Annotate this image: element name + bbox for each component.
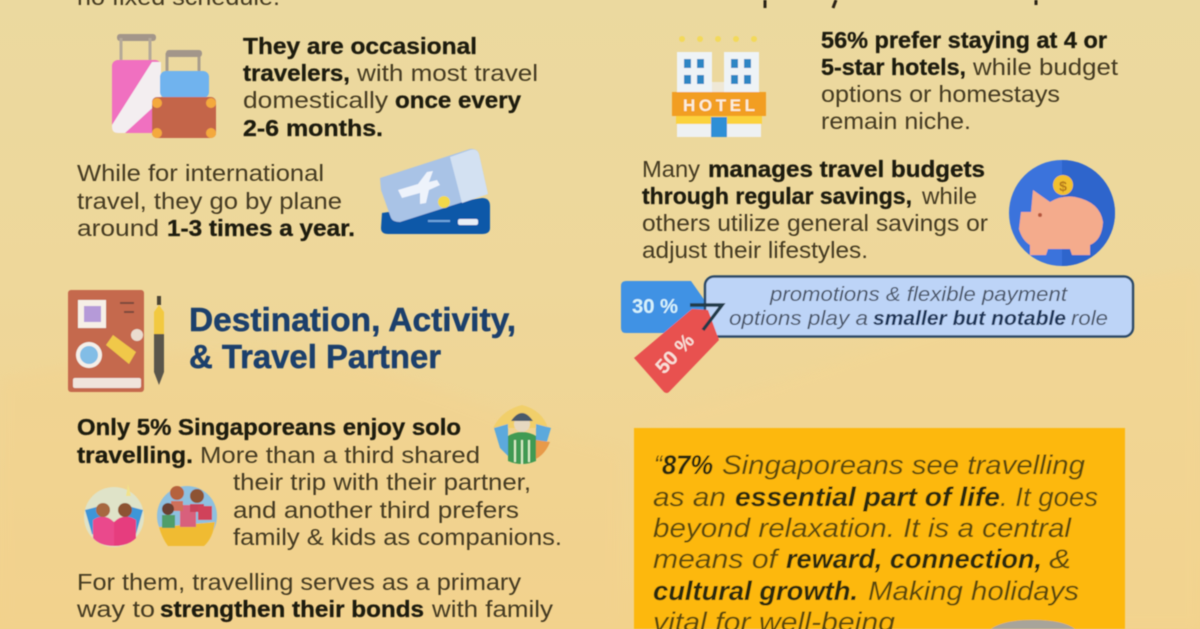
text: international travel: While for international [77, 160, 324, 186]
text: hotel preference [821, 27, 1119, 134]
text: strengthening bonds: way to [76, 596, 155, 622]
text: occasional travelers: with most travel [356, 60, 538, 86]
text: international travel: 1-3 times a year. [167, 215, 355, 241]
icon: family [157, 486, 217, 546]
text: strengthening bonds: with family [431, 596, 554, 622]
text: solo travelling and companions: More than a third shared [200, 442, 480, 468]
text: hotel preference: 5-star hotels, [821, 54, 966, 80]
callout: promotions and flexible payment: smaller but notable [873, 308, 1066, 330]
text: strengthening bonds: strengthen their bonds [160, 596, 424, 622]
panel: quote [634, 428, 1125, 629]
text: solo travelling and companions: family & kids as companions. [233, 524, 562, 550]
text: clipped top line right [765, 0, 1036, 8]
heading: destination, activity and travel partner: Destination, Activity, [189, 301, 516, 338]
text: quote about travelling: reward, connection, [786, 544, 1042, 574]
text: quote about travelling: Singaporeans see travelling [722, 450, 1085, 480]
text: quote about travelling: means of [653, 544, 780, 574]
text: occasional travelers: once every [395, 87, 521, 113]
text: quote about travelling: “ [654, 450, 664, 480]
icon: piggy bank [1009, 160, 1115, 266]
text: hotel preference: remain niche. [821, 108, 971, 134]
icon: red 50 percent tag: 50 % [652, 330, 699, 378]
callout: promotions and flexible payment [705, 276, 1133, 336]
text: quote about travelling: 87% [662, 450, 713, 480]
text: travel budgets: Many [642, 156, 701, 182]
text: occasional travelers [243, 33, 538, 141]
callout: promotions and flexible payment: promotions & flexible payment [769, 284, 1069, 306]
text: quote about travelling: Making holidays [868, 576, 1079, 606]
icon: travel journal and pen [68, 290, 164, 392]
text: occasional travelers: domestically [243, 87, 389, 113]
text: solo travelling and companions: travelling. [77, 442, 193, 468]
icon: solo traveller [493, 405, 551, 464]
text: travel budgets: through regular savings, [642, 183, 912, 209]
text: quote about travelling: as an [653, 482, 726, 512]
icon: hotel: HOTEL [683, 96, 755, 115]
text: hotel preference: while budget [972, 54, 1119, 80]
icon: luggage [112, 34, 216, 138]
text: travel budgets: others utilize general savings or [642, 210, 988, 236]
text: quote about travelling: essential part of life [735, 482, 1000, 512]
text: travel budgets: manages travel budgets [708, 156, 985, 182]
icon: hotel [672, 36, 766, 137]
icon: plane tickets [380, 149, 490, 234]
text: occasional travelers: travelers, [243, 60, 350, 86]
text: international travel: travel, they go by plane [77, 188, 342, 214]
shape: gray circle at panel bottom [991, 620, 1075, 629]
text: travel budgets: while [921, 183, 977, 209]
text: solo travelling and companions: their trip with their partner, [233, 469, 531, 495]
text: occasional travelers: 2-6 months. [243, 115, 383, 141]
heading: destination, activity and travel partner: & Travel Partner [189, 338, 441, 375]
text: hotel preference: 56% prefer staying at 4 or [821, 27, 1107, 53]
icon: blue 30 percent tag: 30 % [632, 296, 678, 318]
text: solo travelling and companions: and another third prefers [233, 497, 519, 523]
text: hotel preference: options or homestays [821, 81, 1060, 107]
text: travel budgets: adjust their lifestyles. [642, 237, 868, 263]
text: international travel [77, 160, 355, 241]
callout: promotions and flexible payment: role [1071, 308, 1108, 330]
text: international travel: around [77, 215, 159, 241]
text: strengthening bonds: For them, travelling serves as a primary [77, 569, 522, 595]
text: quote about travelling: cultural growth. [653, 576, 858, 606]
text: quote about travelling: beyond relaxation. It is a central [653, 513, 1072, 543]
text: strengthening bonds [76, 569, 554, 622]
text: solo travelling and companions: Only 5% Singaporeans enjoy solo [77, 414, 461, 440]
text: solo travelling and companions [77, 414, 562, 550]
icon: red 50 percent tag [634, 305, 722, 393]
text: quote about travelling: & [1049, 544, 1071, 574]
heading: destination, activity and travel partner [189, 301, 516, 375]
icon: piggy bank: $ [1059, 178, 1067, 194]
text: travel budgets [642, 156, 988, 263]
text: occasional travelers: They are occasional [243, 33, 477, 59]
callout: promotions and flexible payment: options play a [729, 308, 868, 330]
text: quote about travelling: . It goes [1000, 482, 1098, 512]
icon: blue 30 percent tag [621, 281, 710, 333]
text: quote about travelling [653, 450, 1098, 629]
icon: couple [84, 484, 144, 547]
